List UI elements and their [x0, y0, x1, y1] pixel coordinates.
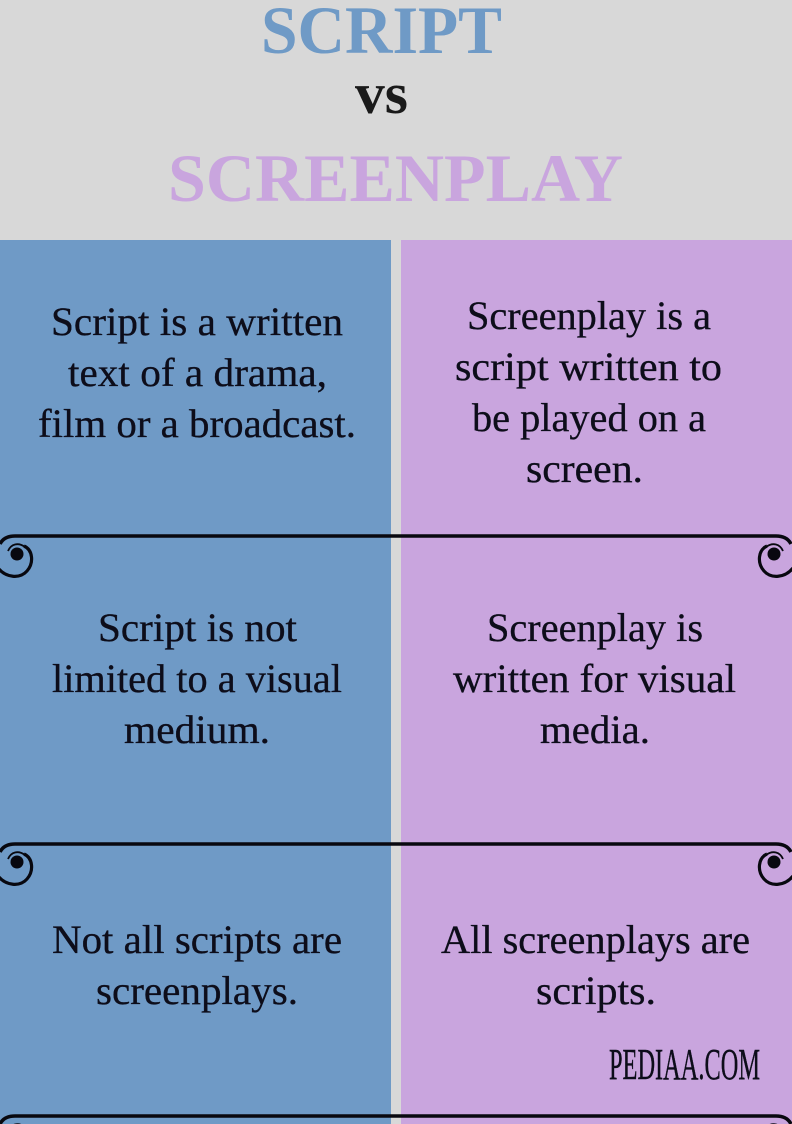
title: SCREENPLAY: SCREENPLAY: [168, 140, 623, 216]
text: script relation: Not all scripts are: [52, 917, 342, 962]
text: screenplay definition: [455, 293, 722, 491]
text: script definition: film or a broadcast.: [38, 401, 356, 446]
text: screenplay medium: written for visual: [453, 656, 736, 701]
title: vs: vs: [355, 61, 408, 126]
text: screenplay medium: Screenplay is: [487, 605, 703, 650]
text: screenplay definition: be played on a: [472, 395, 706, 440]
divider ornament 1: [0, 536, 792, 576]
panel: screenplay column: [401, 240, 792, 1124]
text: screenplay medium: media.: [540, 707, 650, 752]
panel: script column: [0, 240, 391, 1124]
text: screenplay relation: [441, 917, 750, 1013]
text: screenplay definition: screen.: [526, 446, 643, 491]
text: screenplay definition: script written to: [455, 344, 722, 389]
text: script relation: [52, 917, 342, 1013]
text: screenplay relation: scripts.: [536, 968, 656, 1013]
text: script definition: text of a drama,: [68, 350, 327, 395]
text: script medium: [52, 605, 342, 752]
divider ornament 3: [0, 1116, 792, 1124]
text: screenplay relation: All screenplays are: [441, 917, 750, 962]
text: script definition: [38, 299, 356, 446]
text: script relation: screenplays.: [96, 968, 298, 1013]
text: script medium: medium.: [124, 707, 270, 752]
text: script medium: Script is not: [98, 605, 297, 650]
text: script medium: limited to a visual: [52, 656, 342, 701]
text: script definition: Script is a written: [51, 299, 343, 344]
text: screenplay definition: Screenplay is a: [467, 293, 711, 338]
text: screenplay medium: [453, 605, 736, 752]
divider ornament 2: [0, 844, 792, 884]
